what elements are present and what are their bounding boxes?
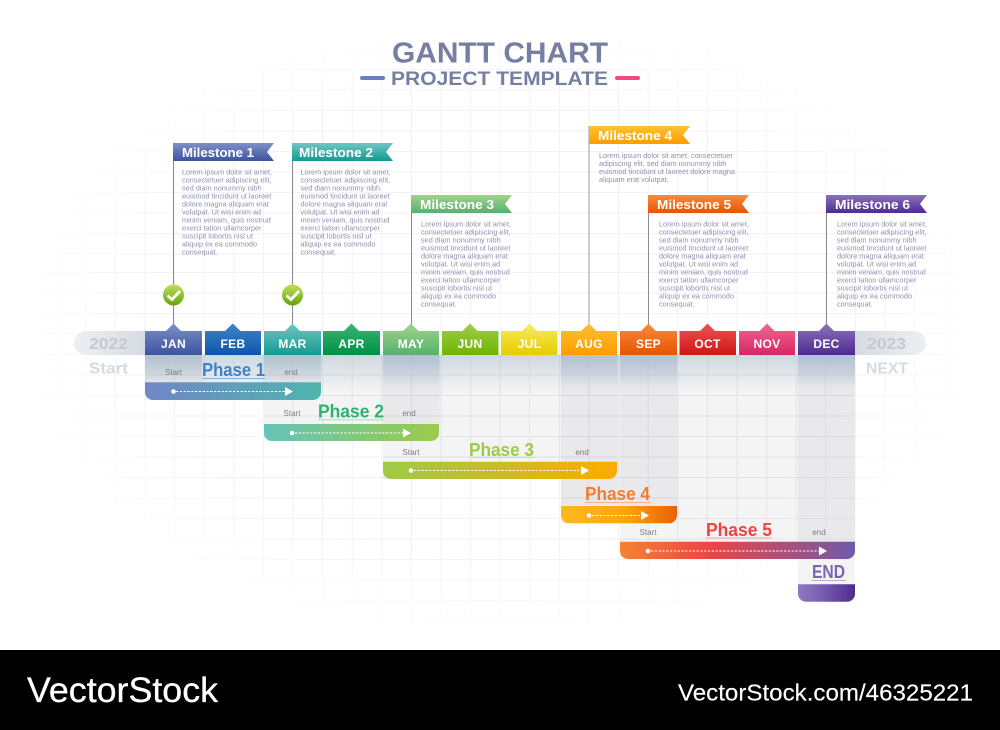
milestone 3: Milestone 3 xyxy=(420,197,494,212)
month: JAN: JAN xyxy=(161,337,186,351)
milestone 3 xyxy=(411,195,512,331)
milestone 4: Lorem ipsum dolor sit amet, consectetuer xyxy=(599,151,733,160)
start label: Start xyxy=(89,360,129,378)
milestone 6: sed diam nonummy nibh xyxy=(837,236,916,245)
milestone 5: euismod tincidunt ut laoreet xyxy=(659,244,748,253)
milestone 3: minim veniam, quis nostrud xyxy=(421,268,510,277)
milestone 2: minim veniam, quis nostrud xyxy=(300,215,389,224)
milestone 4: aliquam erat volutpat. xyxy=(599,175,669,184)
phase 5: Start xyxy=(640,528,657,537)
month: MAY xyxy=(383,324,439,355)
milestone 5: consequat. xyxy=(659,300,695,309)
month: FEB xyxy=(205,324,261,355)
milestone 6 xyxy=(826,195,927,331)
background grid xyxy=(40,40,960,640)
month: APR: APR xyxy=(338,337,365,351)
phase 1 xyxy=(145,359,321,400)
milestone 1: consequat. xyxy=(182,247,218,256)
milestone 3: aliquip ex ea commodo xyxy=(421,292,496,301)
phase 5 xyxy=(620,519,855,559)
milestone 2: aliquip ex ea commodo xyxy=(300,239,376,248)
phase 2: end xyxy=(402,409,416,418)
milestone 4: Milestone 4 xyxy=(598,128,673,143)
month: NOV: NOV xyxy=(754,337,780,351)
phase 1: Start xyxy=(165,368,183,377)
milestone 1: exerci tation ullamcorper xyxy=(182,223,262,232)
milestone 6: aliquip ex ea commodo xyxy=(837,292,912,301)
month: JUN xyxy=(442,324,498,355)
milestone 5: exerci tation ullamcorper xyxy=(659,276,739,285)
shaded schedule panel xyxy=(145,355,855,600)
month: OCT xyxy=(680,324,736,355)
milestone 1 xyxy=(173,143,274,331)
milestone 6: suscipit lobortis nisl ut xyxy=(837,284,908,293)
footer logo: VectorStock xyxy=(27,671,219,710)
month: MAR xyxy=(264,324,321,355)
phase 3: Start xyxy=(403,448,420,457)
month: SEP xyxy=(620,324,677,355)
milestone 2: consectetuer adipiscing elit, xyxy=(300,175,390,184)
milestone 1: volutpat. Ut wisi enim ad xyxy=(182,207,261,216)
milestone 2: dolore magna aliquam erat xyxy=(300,199,387,208)
milestone 2: euismod tincidunt ut laoreet xyxy=(300,191,390,200)
milestone 6: minim veniam, quis nostrud xyxy=(837,268,926,277)
phase 5: Phase 5 xyxy=(706,519,772,540)
year bar 2022: 2022 xyxy=(89,336,128,353)
milestone 6: exerci tation ullamcorper xyxy=(837,276,917,285)
milestone 2: Milestone 2 xyxy=(299,145,373,160)
end block xyxy=(798,561,855,602)
title: GANTT CHART xyxy=(392,38,608,70)
milestone 3: consequat. xyxy=(421,300,457,309)
milestone 3: euismod tincidunt ut laoreet xyxy=(421,244,510,253)
milestone 2: exerci tation ullamcorper xyxy=(300,223,381,232)
blue dash xyxy=(360,76,385,80)
milestone 2: consequat. xyxy=(300,247,336,256)
milestone 2: suscipit lobortis nisl ut xyxy=(300,231,371,240)
month: AUG xyxy=(561,324,617,355)
milestone 5: Milestone 5 xyxy=(657,197,731,212)
milestone 3: volutpat. Ut wisi enim ad xyxy=(421,260,500,269)
milestone 1: Lorem ipsum dolor sit amet, xyxy=(182,167,272,176)
month: SEP: SEP xyxy=(636,337,661,351)
month: JUL xyxy=(501,324,558,355)
milestone 1: aliquip ex ea commodo xyxy=(182,239,257,248)
title block xyxy=(360,38,640,90)
month: DEC: DEC xyxy=(813,337,840,351)
milestone 1: euismod tincidunt ut laoreet xyxy=(182,191,271,200)
phase 1: end xyxy=(284,368,298,377)
month: JUL: JUL xyxy=(518,337,541,351)
month: OCT: OCT xyxy=(694,337,721,351)
milestone 6: Milestone 6 xyxy=(835,197,910,212)
milestone 1: sed diam nonummy nibh xyxy=(182,183,262,192)
month: MAR: MAR xyxy=(278,337,307,351)
phase 3 xyxy=(383,439,617,479)
milestone 6: consectetuer adipiscing elit, xyxy=(837,228,927,237)
phase 3: Phase 3 xyxy=(469,439,534,460)
icon: check mark 1 xyxy=(163,284,184,306)
milestone 6: Lorem ipsum dolor sit amet, xyxy=(837,220,927,229)
month: DEC xyxy=(798,324,855,355)
phase 1: Phase 1 xyxy=(202,359,265,380)
year bar 2023 xyxy=(855,331,926,355)
icon: check mark 2 xyxy=(282,284,303,306)
footer url: VectorStock.com/46325221 xyxy=(678,680,973,706)
month: JAN xyxy=(145,324,202,355)
milestone 1: suscipit lobortis nisl ut xyxy=(182,231,253,240)
milestone 5: minim veniam, quis nostrud xyxy=(659,268,748,277)
month: NOV xyxy=(739,324,795,355)
milestone 2 xyxy=(292,143,393,331)
month: APR xyxy=(323,324,380,355)
month: JUN: JUN xyxy=(458,337,482,351)
milestone 2: sed diam nonummy nibh xyxy=(300,183,380,192)
milestone 1: minim veniam, quis nostrud xyxy=(182,215,271,224)
milestone 3: sed diam nonummy nibh xyxy=(421,236,500,245)
milestone 5 xyxy=(648,195,749,331)
pink dash xyxy=(615,76,640,80)
milestone 2: volutpat. Ut wisi enim ad xyxy=(300,207,380,216)
milestone 6: volutpat. Ut wisi enim ad xyxy=(837,260,916,269)
phase 4: Phase 4 xyxy=(585,483,651,504)
phase 4 xyxy=(561,483,677,523)
milestone 1: Milestone 1 xyxy=(182,145,254,160)
milestone 3: exerci tation ullamcorper xyxy=(421,276,501,285)
milestone 5: aliquip ex ea commodo xyxy=(659,292,734,301)
phase 2: Phase 2 xyxy=(318,400,384,422)
phase 3: end xyxy=(575,448,589,457)
year bar 2022 xyxy=(74,331,145,355)
month: AUG: AUG xyxy=(575,337,603,351)
milestone 1: dolore magna aliquam erat xyxy=(182,199,269,208)
milestone 6: euismod tincidunt ut laoreet xyxy=(837,244,926,253)
month: FEB: FEB xyxy=(221,337,245,351)
milestone 3: Lorem ipsum dolor sit amet, xyxy=(421,220,511,229)
month: MAY: MAY xyxy=(398,337,424,351)
milestone 5: suscipit lobortis nisl ut xyxy=(659,284,730,293)
year bar 2023: 2023 xyxy=(867,336,906,353)
milestone 4 xyxy=(589,126,736,331)
milestone 5: consectetuer adipiscing elit, xyxy=(659,228,749,237)
milestone 4: euismod tincidunt ut laoreet dolore magna xyxy=(599,167,736,176)
footer band xyxy=(0,650,1000,730)
next label: NEXT xyxy=(866,360,908,378)
end block: END xyxy=(812,561,845,582)
milestone 2: Lorem ipsum dolor sit amet, xyxy=(300,167,391,176)
milestone 3: suscipit lobortis nisl ut xyxy=(421,284,492,293)
subtitle: PROJECT TEMPLATE xyxy=(391,68,608,90)
milestone 5: volutpat. Ut wisi enim ad xyxy=(659,260,738,269)
milestone 6: consequat. xyxy=(837,300,873,309)
milestone 6: dolore magna aliquam erat xyxy=(837,252,924,261)
phase 2: Start xyxy=(284,409,301,418)
phase 5: end xyxy=(812,528,826,537)
milestone 5: Lorem ipsum dolor sit amet, xyxy=(659,220,749,229)
milestone 1: consectetuer adipiscing elit, xyxy=(182,175,272,184)
milestone 4: adipiscing elit, sed diam nonummy nibh xyxy=(599,159,726,168)
milestone 5: sed diam nonummy nibh xyxy=(659,236,738,245)
phase 2 xyxy=(264,400,439,441)
milestone 5: dolore magna aliquam erat xyxy=(659,252,746,261)
milestone 3: dolore magna aliquam erat xyxy=(421,252,508,261)
milestone 3: consectetuer adipiscing elit, xyxy=(421,228,511,237)
